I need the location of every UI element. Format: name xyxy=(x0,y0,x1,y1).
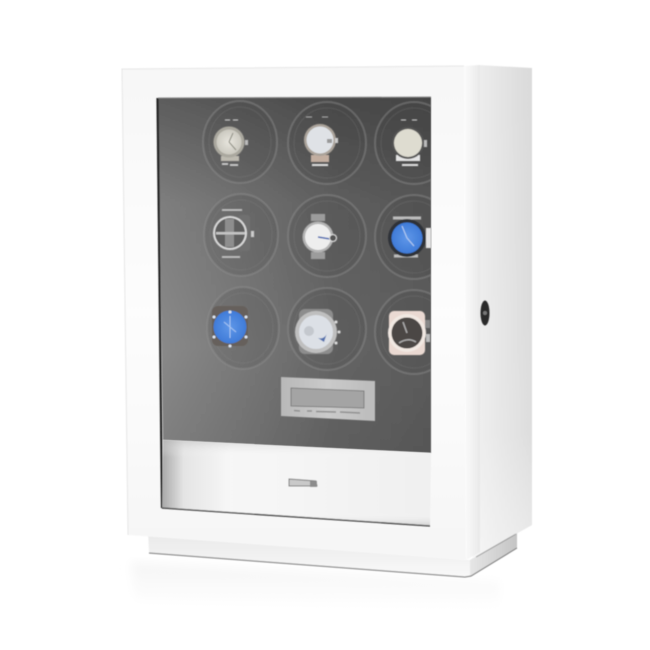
side lock xyxy=(480,300,490,326)
watch 4 xyxy=(213,210,254,257)
dark inner panel xyxy=(158,97,431,453)
watch 2 xyxy=(304,117,338,165)
floor reflection xyxy=(131,562,500,610)
watch 7 xyxy=(212,306,248,348)
watch 9 xyxy=(388,311,430,355)
watch 8 xyxy=(295,309,340,354)
drawer handle xyxy=(289,479,317,487)
product illustration: watch winder cabinet xyxy=(122,65,532,578)
display screen xyxy=(291,388,364,408)
left window edge xyxy=(158,98,162,508)
watch 1 xyxy=(214,120,248,165)
cabinet base plinth xyxy=(148,530,517,577)
cabinet right side xyxy=(464,65,532,560)
inner rings xyxy=(304,108,413,175)
glass window xyxy=(158,97,431,508)
lower drawer xyxy=(162,440,431,526)
cabinet front frame xyxy=(122,66,466,560)
winder rings xyxy=(203,101,453,374)
winder rings and watches xyxy=(203,101,453,374)
corner bevel xyxy=(464,65,480,560)
watch 6 xyxy=(388,218,431,257)
LCD control panel xyxy=(281,377,375,421)
control buttons xyxy=(294,410,360,413)
watch 3 xyxy=(392,120,427,165)
watch 5 xyxy=(302,214,336,259)
